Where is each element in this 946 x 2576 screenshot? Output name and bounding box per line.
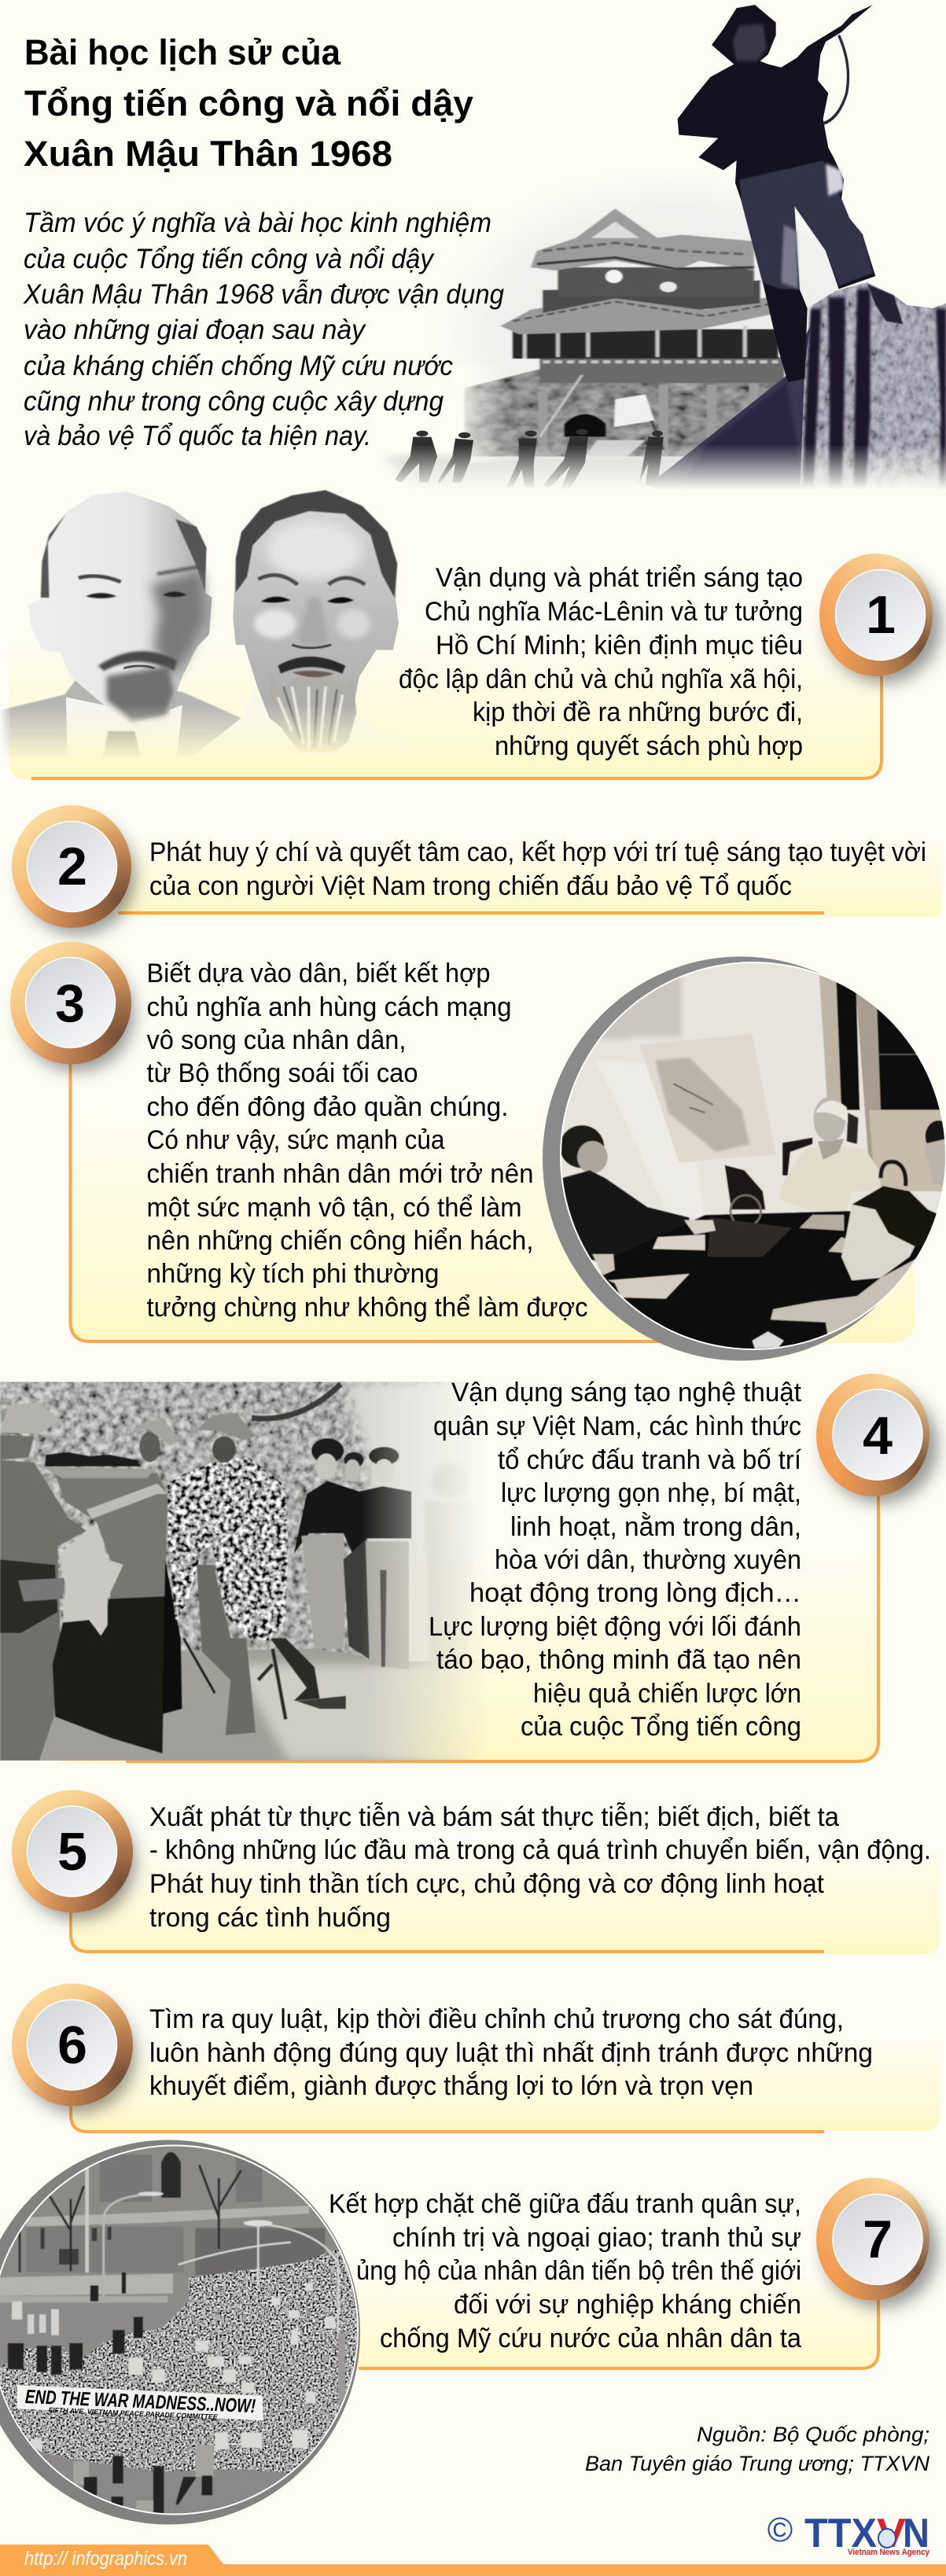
panel 3 text: tưởng chừng như không thể làm được <box>146 1293 588 1323</box>
coat and shirt <box>2 680 241 753</box>
photo: citadel gate <box>386 170 868 502</box>
intro text: vào những giai đoạn sau này <box>24 315 366 345</box>
fade of wall's left edge <box>452 365 506 463</box>
photo: soldier and flag cloth <box>653 5 946 503</box>
fighters row <box>311 1438 344 1463</box>
panel 1 <box>0 490 940 780</box>
panel 7 text: đối với sự nghiệp kháng chiến <box>454 2290 801 2320</box>
footer url: http:// infographics.vn <box>24 2548 187 2570</box>
panel 2 text: của con người Việt Nam trong chiến đấu bảo vệ Tổ quốc <box>149 871 792 901</box>
pole and lamps over crowd <box>179 2223 338 2333</box>
ground <box>39 1648 436 1761</box>
left soldier <box>0 1460 87 1761</box>
badge 6 <box>12 1983 135 2113</box>
light sky at right <box>341 1382 478 1662</box>
panel 6 text: luôn hành động đúng quy luật thì nhất định tránh được những <box>149 2038 873 2068</box>
circular photo: anti-war march: END THE WAR MADNESS..NOW! <box>24 2386 256 2417</box>
panel 1 text: kịp thời đề ra những bước đi, <box>473 697 803 727</box>
panel 6 <box>12 1983 940 2132</box>
badge 5: 5 <box>57 1822 87 1882</box>
panel 7 border <box>359 2296 878 2368</box>
camouflaged fighter <box>197 1565 256 1735</box>
panel 6 border <box>71 2101 824 2132</box>
pavement people <box>12 2302 59 2335</box>
badge 7 <box>816 2178 937 2307</box>
panel 3 text: nên những chiến công hiển hách, <box>146 1226 533 1256</box>
panel 7 text: ủng hộ của nhân dân tiến bộ trên thế giới <box>356 2256 801 2286</box>
panel 2 <box>12 805 942 934</box>
panel 7 text: chính trị và ngoại giao; tranh thủ sự <box>392 2223 801 2253</box>
circular photo: anti-war march: FIFTH AVE. VIETNAM PEACE PARADE COMMITTEE <box>49 2406 218 2421</box>
panel 3 text: vô song của nhân dân, <box>146 1025 406 1055</box>
shirt <box>191 690 438 757</box>
chair and far-right man <box>881 1161 906 1186</box>
panel 5 text: Xuất phát từ thực tiễn và bám sát thực tiễn; biết địch, biết ta <box>149 1802 839 1832</box>
panel 1 text: Hồ Chí Minh; kiên định mục tiêu <box>436 631 803 661</box>
Ho Chi Minh figure <box>782 1138 812 1176</box>
photo: soldiers and fighters <box>0 1382 488 1761</box>
panel 4 background <box>51 1541 879 1764</box>
panel 6 text <box>149 2004 873 2101</box>
logo: TTXVN: V <box>877 2511 906 2556</box>
badge 4 <box>816 1374 937 1503</box>
panel 5 text: trong các tình huống <box>149 1903 391 1933</box>
panel 4 text: hòa với dân, thường xuyên <box>495 1545 801 1575</box>
window <box>836 977 859 1110</box>
portrait: Ho Chi Minh head <box>233 490 399 753</box>
panel 3 text: chiến tranh nhân dân mới trở nên <box>146 1159 533 1189</box>
panel 6 background <box>71 2037 940 2131</box>
badge 3 <box>10 942 134 1071</box>
panel 3 text: Biết dựa vào dân, biết kết hợp <box>146 959 491 988</box>
intro text: Xuân Mậu Thân 1968 vẫn được vận dụng <box>23 279 505 310</box>
header photo: Citadel gate and soldier statue <box>377 5 946 508</box>
panel 2 text <box>149 837 926 901</box>
panel 2 underline <box>118 911 824 914</box>
badge 2: 2 <box>57 837 87 896</box>
flag star <box>59 1523 123 1636</box>
hands <box>684 1220 716 1235</box>
soldier silhouette <box>678 5 875 382</box>
panel 4 text: quân sự Việt Nam, các hình thức <box>433 1411 801 1441</box>
panel 2 background <box>118 834 942 917</box>
second fighter head <box>139 1432 160 1462</box>
footer bar <box>0 2545 946 2576</box>
door frame <box>819 971 841 1102</box>
title: Tổng tiến công và nổi dậy <box>24 83 473 123</box>
panel 3 border <box>71 1058 668 1341</box>
intro text: của kháng chiến chống Mỹ cứu nước <box>24 351 453 381</box>
source note <box>585 2423 929 2475</box>
flag cloth <box>800 282 946 503</box>
badge 5 <box>12 1790 135 1919</box>
panel 7 text: Kết hợp chặt chẽ giữa đấu tranh quân sự, <box>329 2189 801 2219</box>
panel 3 text <box>146 959 588 1323</box>
left man <box>560 1125 604 1168</box>
intro text: Tầm vóc ý nghĩa và bài học kinh nghiệm <box>24 208 491 238</box>
panel 5 background <box>71 1840 940 1954</box>
logo: TTXVN <box>767 2511 930 2557</box>
panel 1 text: những quyết sách phù hợp <box>495 731 803 761</box>
papers <box>608 1274 690 1299</box>
title <box>24 32 473 174</box>
logo: TTXVN: N <box>903 2511 929 2556</box>
panel 7 text: chống Mỹ cứu nước của nhân dân ta <box>380 2324 801 2353</box>
circular photo: anti-war march <box>0 2139 377 2526</box>
panel 4 text: lực lượng gọn nhẹ, bí mật, <box>501 1478 801 1508</box>
panel 4 text: linh hoạt, nằm trong dân, <box>510 1512 801 1542</box>
panel 4 text: của cuộc Tổng tiến công <box>521 1712 801 1742</box>
panel 5 text <box>149 1802 931 1933</box>
title: Xuân Mậu Thân 1968 <box>24 134 392 174</box>
badge 1 <box>819 554 940 683</box>
placards <box>31 2283 336 2449</box>
panel 4 text: Lực lượng biệt động với lối đánh <box>429 1612 801 1642</box>
flag <box>55 1473 167 1599</box>
logo: TTXVN: TTX <box>804 2511 877 2556</box>
crowd <box>0 2249 362 2475</box>
panel 1 text <box>399 563 803 761</box>
panel 5 <box>12 1790 940 1954</box>
march banner <box>17 2385 263 2420</box>
panel 4 text: Vận dụng sáng tạo nghệ thuật <box>451 1378 802 1408</box>
soldiers running <box>395 429 664 489</box>
panel 1 text: độc lập dân chủ và chủ nghĩa xã hội, <box>399 664 803 694</box>
wall map <box>639 1034 776 1162</box>
badge 3: 3 <box>55 973 85 1033</box>
right man <box>852 1186 946 1246</box>
logo: TTXVN: © <box>767 2511 793 2549</box>
intro text: cũng như trong công cuộc xây dựng <box>24 386 444 417</box>
intro text: của cuộc Tổng tiến công và nổi dậy <box>24 244 435 274</box>
source note: Nguồn: Bộ Quốc phòng; <box>697 2423 929 2446</box>
panel 4 text: táo bạo, thông minh đã tạo nên <box>436 1645 801 1675</box>
panel 4 border <box>126 1494 878 1761</box>
title: Bài học lịch sử của <box>24 32 341 72</box>
panel 4 text: hoạt động trong lòng địch… <box>469 1578 801 1608</box>
panel 3 text: chủ nghĩa anh hùng cách mạng <box>146 992 511 1022</box>
badge 7: 7 <box>863 2210 893 2269</box>
building <box>0 2139 367 2275</box>
panel 5 border <box>71 1907 824 1952</box>
source note: Ban Tuyên giáo Trung ương; TTXVN <box>585 2452 929 2475</box>
panel 4 text: hiệu quả chiến lược lớn <box>533 1679 801 1709</box>
intro text <box>23 208 505 451</box>
panel 5 text: - không những lúc đầu mà trong cả quá trình chuyển biến, vận động. <box>149 1835 931 1865</box>
panel 3 text: những kỳ tích phi thường <box>146 1259 439 1289</box>
panel 6 text: khuyết điểm, giành được thắng lợi to lớn và trọn vẹn <box>149 2071 753 2101</box>
badge 4: 4 <box>863 1406 893 1466</box>
panel 1 text: Vận dụng và phát triển sáng tạo <box>436 563 803 593</box>
panel 7 <box>0 2139 937 2526</box>
badge 2 <box>12 805 135 934</box>
panel 6 text: Tìm ra quy luật, kịp thời điều chỉnh chủ trương cho sát đúng, <box>149 2004 844 2034</box>
panel 3 background <box>69 1101 915 1343</box>
bottom fade of header photo <box>377 444 946 490</box>
street <box>26 2448 309 2522</box>
panel 3 text: từ Bộ thống soái tối cao <box>146 1058 418 1088</box>
panel 7 background <box>346 2265 879 2370</box>
badge 1: 1 <box>866 585 896 645</box>
dark row of heads <box>45 1452 142 1466</box>
badge 6: 6 <box>57 2015 87 2075</box>
logo: TTXVN: Vietnam News Agency <box>848 2548 930 2557</box>
portrait: Lenin head <box>28 491 212 723</box>
panel 4 <box>0 1374 937 1764</box>
plaza wall and pavement <box>0 2274 173 2296</box>
panel 1 text: Chủ nghĩa Mác-Lênin và tư tưởng <box>425 597 803 627</box>
panel 3 <box>10 942 946 1364</box>
panel 1 border <box>31 668 882 778</box>
panel 1 background <box>9 629 882 780</box>
lamp and table <box>725 1165 765 1209</box>
circular photo: meeting with the President <box>543 955 946 1364</box>
panel 3 text: cho đến đông đảo quần chúng. <box>146 1092 508 1122</box>
intro text: và bảo vệ Tổ quốc ta hiện nay. <box>24 421 371 451</box>
street people <box>73 2445 214 2514</box>
skirt <box>53 1596 165 1754</box>
panel 7 text <box>329 2189 801 2353</box>
portraits: Lenin and Ho Chi Minh <box>0 490 438 757</box>
panel 4 text <box>429 1378 802 1742</box>
panel 4 text: tổ chức đấu tranh và bố trí <box>498 1445 802 1475</box>
panel 3 text: một sức mạnh vô tận, có thể làm <box>146 1193 522 1223</box>
panel 3 text: Có như vậy, sức mạnh của <box>146 1125 445 1155</box>
statue wedge <box>653 321 946 503</box>
panel 5 text: Phát huy tinh thần tích cực, chủ động và cơ động linh hoạt <box>149 1869 825 1899</box>
